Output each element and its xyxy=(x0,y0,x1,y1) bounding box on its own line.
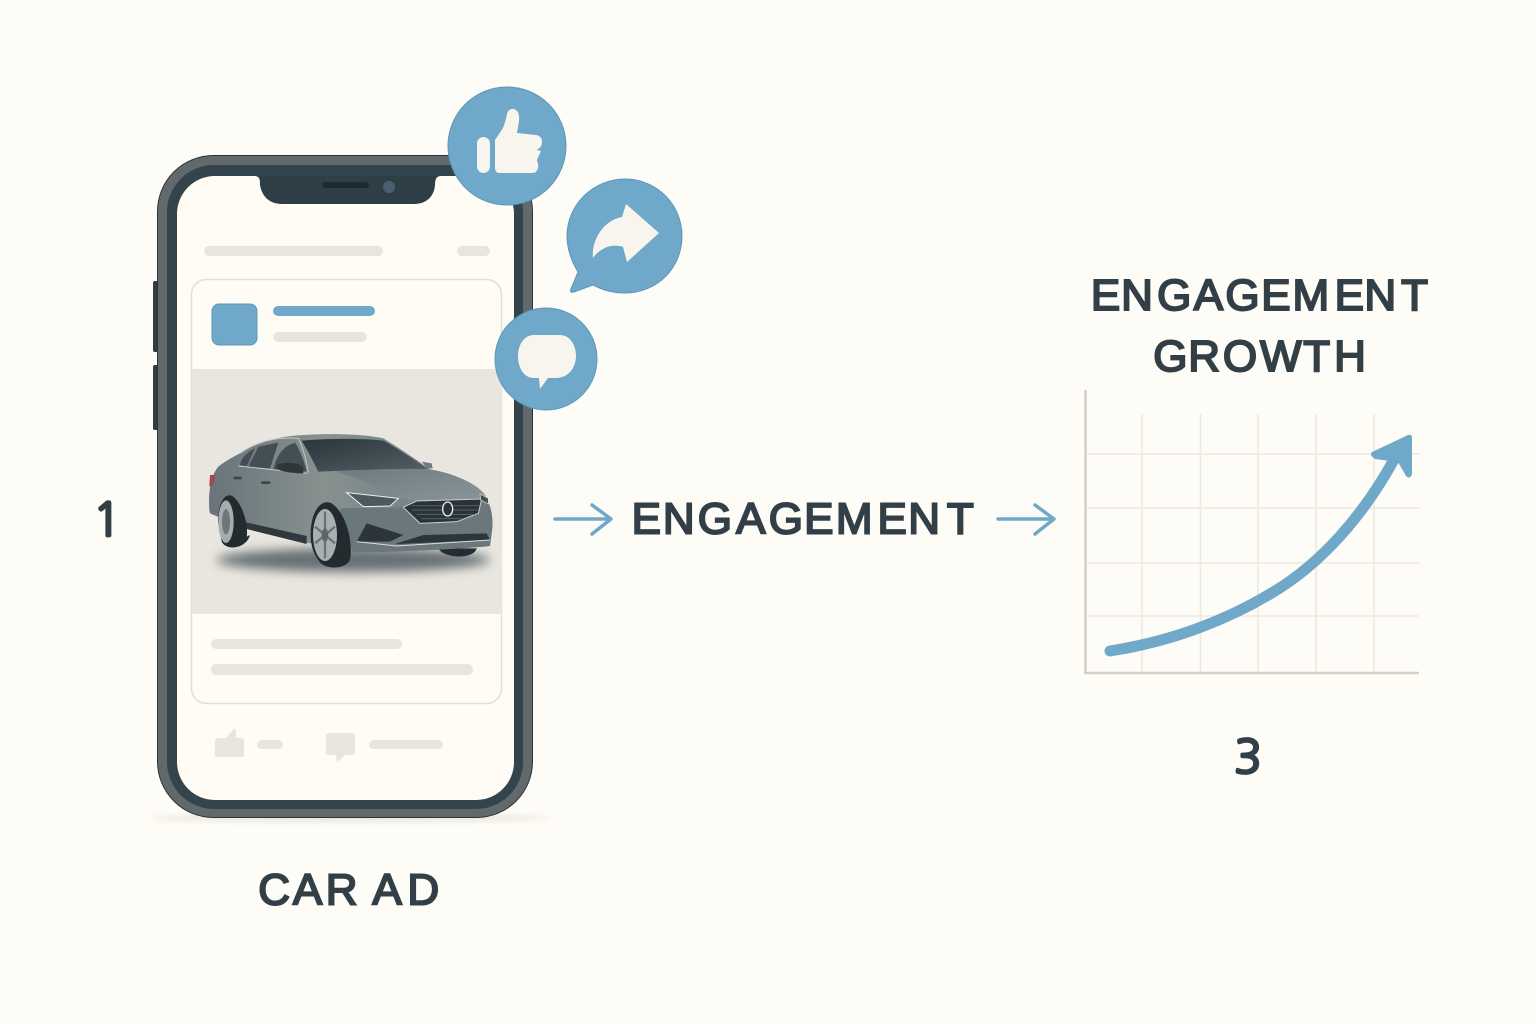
advertiser name bars xyxy=(273,306,375,342)
phone screen xyxy=(177,176,514,800)
reaction row xyxy=(215,729,443,763)
arrow: to engagement xyxy=(555,505,611,534)
heading: engagement growth xyxy=(1091,271,1428,381)
step number 1: 1 xyxy=(93,497,121,543)
label: engagement: ENGAGEMENT xyxy=(632,494,974,544)
car illustration xyxy=(209,434,493,572)
notch xyxy=(254,176,441,204)
growth arrow xyxy=(1110,435,1412,651)
icon: like bubble xyxy=(448,87,566,205)
label: car ad: CAR AD xyxy=(258,866,439,914)
icon: small comment xyxy=(326,733,355,763)
step number 3: 3 xyxy=(1234,734,1262,780)
phone frame xyxy=(158,156,532,818)
car photo xyxy=(192,369,502,614)
growth chart xyxy=(1086,390,1419,673)
arrow: to chart xyxy=(998,505,1054,534)
chart axes xyxy=(1086,390,1419,673)
ad card xyxy=(192,280,502,704)
icon: small thumb xyxy=(215,729,244,757)
phone side buttons xyxy=(153,281,159,430)
icon: share bubble xyxy=(567,179,682,293)
heading: engagement growth: ENGAGEMENT xyxy=(1091,271,1428,320)
phone xyxy=(150,156,550,822)
ad copy bars xyxy=(211,639,473,675)
icon: comment bubble xyxy=(495,308,597,410)
heading: engagement growth: GROWTH xyxy=(1153,332,1366,381)
advertiser avatar xyxy=(212,304,257,345)
top status bars xyxy=(204,246,490,256)
